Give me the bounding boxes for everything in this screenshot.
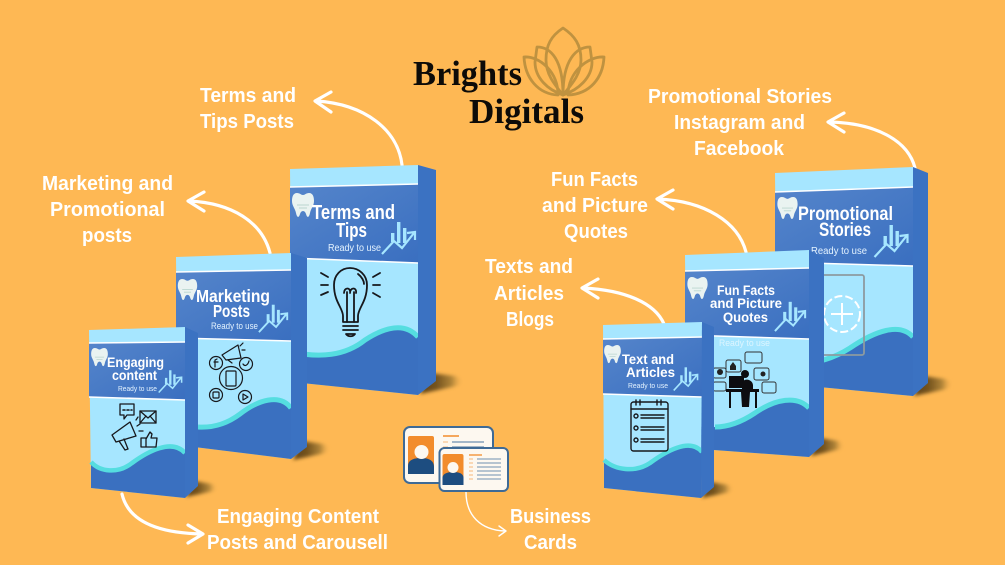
label: Texts and Articles Blogs: Blogs [506, 309, 554, 331]
tagline: Ready to use [811, 246, 867, 257]
icon: social network [210, 343, 252, 404]
title: Marketing [196, 286, 270, 306]
arrow: to Promotional Stories [828, 113, 915, 168]
front face [290, 165, 418, 395]
panel: Promotional Stories box [775, 167, 951, 396]
wave [291, 328, 418, 395]
tagline: Ready to use [628, 381, 668, 390]
label: Terms and Tips Posts: Tips Posts [200, 111, 294, 133]
shadow [702, 482, 733, 498]
shadow [811, 438, 843, 456]
label: Engaging Content Posts and Carousell [207, 506, 388, 554]
wave [686, 400, 809, 457]
panel: Fun Facts box: and Picture [710, 295, 782, 311]
arrow: to Terms and Tips Posts [315, 92, 402, 165]
label: Texts and Articles Blogs [485, 256, 573, 331]
icon: lotus [524, 28, 604, 95]
wave [91, 446, 185, 498]
arrow: to Texts and Articles [582, 279, 664, 324]
panel: Marketing Posts box: Posts [213, 301, 250, 321]
label: Marketing and Promotional posts: Promotional [50, 199, 165, 221]
label: Terms and Tips Posts: Terms and [200, 85, 296, 107]
label: Business Cards [510, 506, 591, 554]
label: Fun Facts and Picture Quotes: and Picture [542, 195, 648, 217]
front face [89, 327, 185, 498]
label: Fun Facts and Picture Quotes [542, 169, 648, 243]
wave [777, 329, 913, 396]
label: Marketing and Promotional posts [42, 173, 173, 247]
arrow: to Fun Facts [657, 190, 746, 252]
front card [440, 448, 508, 491]
panel: Terms and Tips box [290, 165, 462, 395]
label: Business Cards: Business [510, 506, 591, 528]
panel: Terms and Tips box: Tips [336, 220, 367, 242]
label: Terms and Tips Posts [200, 85, 296, 133]
label: Texts and Articles Blogs: Articles [494, 283, 564, 305]
panel: Text and Articles box [603, 322, 733, 498]
front face [176, 253, 291, 459]
back card [404, 427, 493, 483]
chart icon [159, 370, 182, 392]
label: Engaging Content Posts and Carousell: Engaging Content [217, 506, 379, 528]
label: Fun Facts and Picture Quotes: Fun Facts [551, 169, 638, 191]
shadow [914, 376, 951, 396]
side face [701, 322, 714, 498]
title: Promotional [798, 204, 893, 225]
header band [290, 184, 418, 263]
tooth [292, 193, 314, 217]
arrow: to Engaging Content [122, 494, 203, 543]
header band [176, 270, 291, 341]
tooth [687, 277, 708, 299]
chart icon [874, 225, 908, 257]
tooth [91, 348, 108, 366]
icon: business cards [404, 427, 508, 491]
title: Terms and [312, 202, 395, 224]
wave [604, 446, 702, 498]
label: Promotional Stories Instagram and Facebook: Promotional Stories [648, 86, 832, 108]
side face [185, 327, 198, 498]
icon: person at desk [713, 352, 776, 408]
label: Marketing and Promotional posts: Marketing and [42, 173, 173, 195]
panel: Engaging content box: content [112, 367, 157, 383]
panel: Marketing Posts box [176, 253, 329, 460]
icon: story frame [820, 275, 864, 355]
icon: notepad checklist [631, 400, 668, 451]
tagline: Ready to use [118, 384, 157, 393]
icon: megaphone and messages [112, 404, 157, 450]
logo [413, 28, 604, 131]
tagline: Ready to use [328, 243, 381, 254]
header band [603, 337, 702, 397]
arrow: to Business Cards [466, 492, 506, 536]
label: Engaging Content Posts and Carousell: Posts and Carousell [207, 532, 388, 554]
title: Fun Facts [717, 282, 775, 298]
label: Promotional Stories Instagram and Facebook [648, 86, 832, 160]
panel: Engaging content box [89, 327, 217, 498]
tooth [178, 279, 197, 300]
tagline: Ready to use [719, 338, 770, 348]
header band [775, 187, 913, 266]
tooth [604, 345, 621, 363]
label: Marketing and Promotional posts: posts [82, 225, 132, 247]
label: Fun Facts and Picture Quotes: Quotes [564, 221, 628, 243]
title: Text and [622, 351, 674, 367]
label: Texts and Articles Blogs: Texts and [485, 256, 573, 278]
logo word: Brights: Brights [413, 54, 522, 93]
front face [603, 322, 702, 498]
side face [809, 250, 824, 457]
label: Promotional Stories Instagram and Facebook: Instagram and [674, 112, 805, 134]
tooth [777, 197, 798, 219]
panel: Fun Facts box: Quotes [723, 309, 768, 325]
panel: Promotional Stories box: Stories [819, 220, 871, 241]
panel: Fun Facts box [685, 250, 843, 457]
logo word: Digitals: Digitals [469, 92, 584, 131]
side face [291, 253, 307, 459]
side face [418, 165, 436, 395]
shadow [293, 441, 329, 460]
front face [685, 250, 809, 457]
shadow [186, 481, 217, 497]
front face [775, 167, 913, 396]
label: Promotional Stories Instagram and Facebook: Facebook [694, 138, 785, 160]
wave [177, 400, 291, 459]
tagline: Ready to use [211, 321, 258, 332]
header band [685, 268, 809, 339]
label: Business Cards: Cards [524, 532, 577, 554]
chart icon [775, 302, 805, 331]
side face [913, 167, 928, 396]
arrow: to Marketing and Promotional posts [188, 192, 270, 253]
chart icon [674, 367, 698, 390]
icon: light bulb [321, 268, 380, 336]
panel: Text and Articles box: Articles [626, 364, 675, 380]
header band [89, 342, 185, 400]
title: Engaging [107, 354, 164, 370]
chart icon [382, 222, 415, 254]
chart icon [259, 305, 287, 332]
shadow [420, 373, 462, 394]
